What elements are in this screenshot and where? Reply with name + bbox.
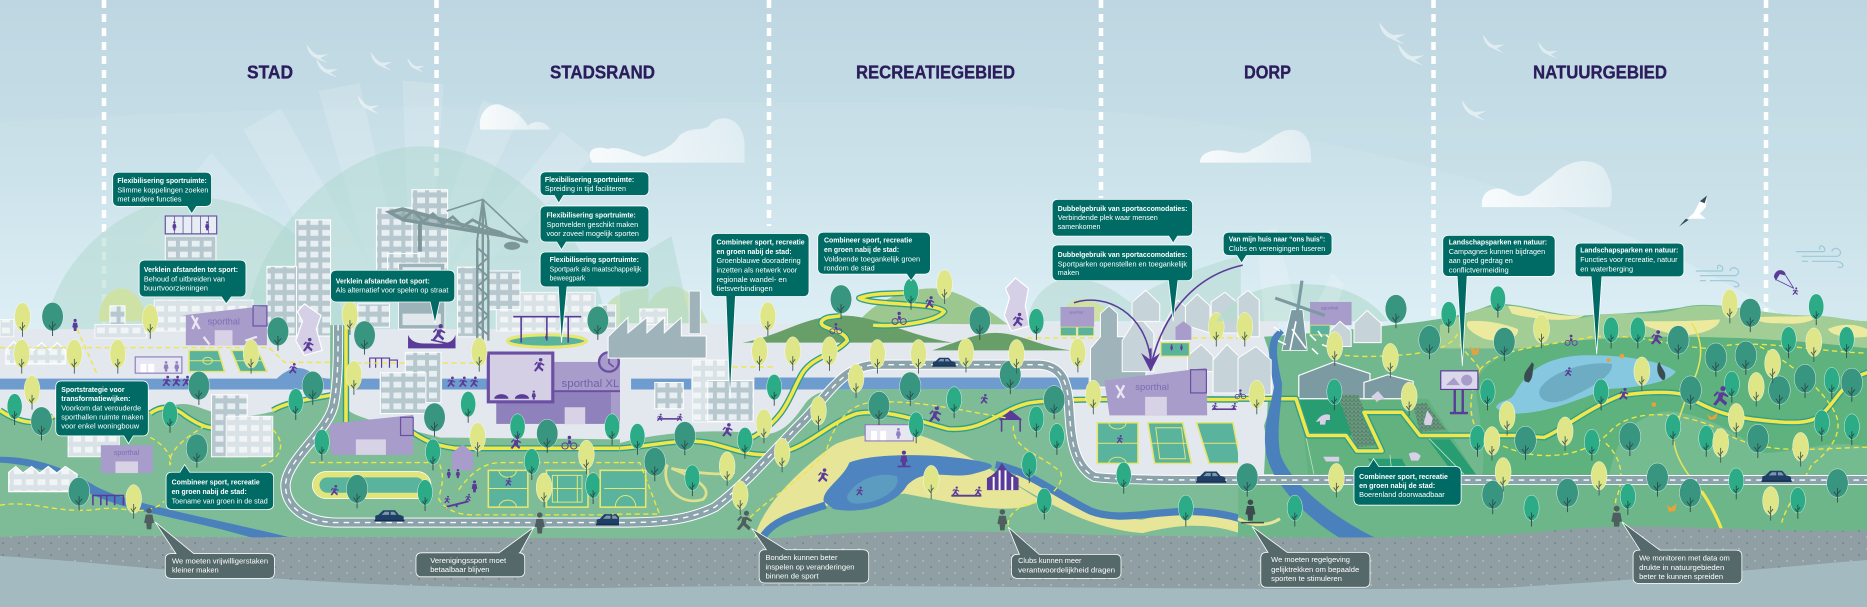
callout: sportvelden geschikt	[540, 206, 649, 250]
row of canal houses	[6, 341, 65, 364]
callout: buurtvoorzieningen: Behoud of uitbreiden van	[144, 275, 225, 283]
car natuur	[1761, 471, 1792, 482]
callout: toegankelijk groen	[818, 232, 930, 281]
ducks and butterflies	[1470, 346, 1718, 512]
quote: bonden: binnen de sport	[766, 572, 819, 581]
back hills	[620, 236, 1241, 325]
callout: waterberging: en waterberging	[1580, 264, 1633, 273]
farm fields	[1264, 399, 1476, 474]
figure: paddler	[1241, 500, 1264, 523]
quote: regelgeving: gelijktrekken om bepaalde	[1271, 565, 1360, 574]
callout: sportstrategie: Voorkom dat verouderde	[61, 403, 141, 412]
urban grey ground	[620, 323, 1241, 484]
callout: groenblauwe dooradering	[711, 233, 809, 399]
runners natuur	[1235, 330, 1729, 406]
seagull	[1679, 195, 1707, 226]
village houses	[1122, 290, 1241, 393]
climbing wall	[296, 304, 322, 355]
callout: groenblauwe dooradering: fietsverbindingen	[716, 284, 773, 293]
cars	[374, 510, 626, 525]
cafe with glass	[1161, 321, 1191, 356]
callout: ons huis: Clubs en verenigingen fuseren	[1229, 244, 1325, 253]
panel: stad scene	[0, 44, 648, 542]
callout: boerenland: Combineer sport, recreatie	[1359, 472, 1448, 481]
side yellow trail	[1674, 323, 1722, 530]
callout: verbindende plek: Verbindende plek waar mensen	[1058, 213, 1158, 222]
dashed paths lower	[0, 426, 621, 515]
callout: sportpark beweegpark: Flexibilisering sportruimte:	[550, 255, 639, 264]
callout: sportpark beweegpark	[540, 252, 649, 343]
callout: groenblauwe dooradering: en groen nabij de stad:	[716, 247, 792, 256]
farm sheds	[1299, 362, 1413, 399]
callouts: middle section	[711, 199, 1193, 583]
callout: sportstrategie: Sportstrategie voor	[61, 385, 125, 394]
callout: sportparken openstellen: maken	[1058, 268, 1079, 277]
quote: clubs: Clubs kunnen meer	[1018, 556, 1082, 565]
village path connector	[1208, 392, 1241, 408]
trees recreatie	[630, 270, 1224, 526]
cafe and playground	[444, 444, 477, 507]
callout: verbindende plek: Dubbelgebruik van sportaccomodaties:	[1058, 204, 1187, 213]
cloud stad	[480, 104, 550, 130]
recreation hills	[743, 288, 1071, 350]
urban grey ground	[0, 329, 621, 445]
road stad	[285, 325, 621, 523]
back hills village	[1216, 228, 1388, 321]
climbing wall recreation	[1004, 278, 1029, 331]
section titles: NATUURGEBIED	[1533, 62, 1667, 82]
runners and cyclist stadsrand	[511, 435, 577, 449]
swimmer and rowers	[72, 319, 478, 387]
hall by road	[329, 415, 413, 455]
changing rooms	[135, 357, 182, 373]
callout: ons huis: Van mijn huis naar “ons huis”:	[1229, 235, 1325, 244]
figure: volunteer	[144, 508, 154, 529]
sky swoop	[0, 0, 1867, 340]
callout: slimme koppelingen: met andere functies	[117, 194, 182, 203]
yellow meander near fields	[666, 465, 735, 501]
callout: toename groen: Combineer sport, recreatie	[172, 478, 260, 487]
dashed paths recreation	[612, 338, 1241, 530]
outdoor gym	[370, 358, 397, 368]
figure: federations runner	[737, 511, 752, 530]
canal	[0, 368, 488, 389]
road natuur	[1238, 467, 1867, 493]
low-rise apartment blocks	[68, 395, 273, 457]
half pipe with skater	[408, 324, 456, 348]
callout: campagnes	[1443, 235, 1555, 366]
river stad	[0, 457, 293, 538]
panel: stadsrand and recreatie scene	[590, 118, 1243, 542]
crops	[1338, 395, 1446, 447]
old town row	[9, 466, 77, 492]
clouds natuur	[1200, 130, 1612, 207]
section titles: DORP	[1244, 62, 1291, 82]
sports fields stadsrand	[488, 470, 640, 507]
quote: regelgeving	[1252, 526, 1370, 587]
quote: monitoren: drukte in natuurgebieden	[1639, 563, 1724, 572]
callout: spelen op straat	[331, 270, 455, 323]
sports fields village	[1097, 423, 1241, 463]
callout: sportparken openstellen: Sportparken openstellen en toegankelijk	[1058, 259, 1187, 268]
callout: toegankelijk groen: Voldoende toegankelijk groen	[824, 254, 920, 263]
callout: campagnes: Campagnes kunnen bijdragen	[1449, 247, 1545, 256]
callout: spreiding in tijd: Spreiding in tijd faciliteren	[545, 184, 626, 193]
village sport hall: sporthal	[1135, 381, 1169, 392]
beach	[754, 433, 1039, 538]
small sporthal and fields	[1060, 307, 1094, 336]
callout: toegankelijk groen: Combineer sport, recreatie	[824, 236, 913, 245]
village grey ground	[1238, 321, 1278, 484]
river	[762, 465, 1241, 538]
callout: sportstrategie	[56, 381, 148, 444]
quote: bonden	[752, 528, 869, 583]
quote: vrijwilligerstaken	[155, 522, 274, 578]
callout: groenblauwe dooradering: regionale wandel- en	[716, 275, 787, 284]
nature lake	[1496, 355, 1676, 414]
road recreation	[619, 365, 1241, 523]
hill path	[859, 292, 944, 326]
quote: betaalbaar	[416, 527, 534, 577]
lower green band	[1238, 484, 1867, 542]
nature ground	[1264, 304, 1867, 542]
sun rays	[138, 81, 593, 314]
lower nature ground	[1608, 411, 1867, 484]
dunes	[1440, 306, 1867, 348]
callout: waterberging: Landschapsparken en natuur:	[1580, 246, 1678, 254]
outdoor sports shelter	[507, 317, 586, 347]
callouts: right section	[1223, 232, 1742, 587]
callout: boerenland	[1354, 459, 1461, 505]
callout: verbindende plek	[1052, 199, 1193, 243]
callout: sportstrategie: sporthallen ruimte maken	[61, 413, 144, 422]
callout: slimme koppelingen: Slimme koppelingen zoeken	[117, 185, 208, 194]
section titles: STADSRAND	[550, 62, 655, 82]
sports field end	[600, 470, 646, 507]
figure: clubs	[997, 509, 1007, 530]
wind swirls	[1696, 246, 1843, 287]
white birds flock	[1274, 327, 1333, 354]
village church	[1091, 306, 1146, 387]
section dividers	[104, 0, 1766, 325]
river dorp	[1265, 329, 1376, 538]
callout: campagnes: aan goed gedrag en	[1449, 256, 1513, 265]
gazebo	[1000, 411, 1021, 432]
village small buildings: sporthal	[1321, 306, 1338, 312]
callout: sportpark beweegpark: Sportpark als maatschappelijk	[550, 264, 641, 273]
factory	[608, 291, 706, 358]
quote: regelgeving: We moeten regelgeving	[1271, 555, 1350, 564]
green path	[620, 399, 1241, 455]
seesaw and figures village	[1212, 403, 1237, 410]
callout: sportstrategie: voor enkel woningbouw	[61, 422, 140, 431]
quote: vrijwilligerstaken: We moeten vrijwilligerstaken	[172, 557, 268, 566]
purple sports hall	[181, 306, 267, 346]
callout: sportvelden geschikt: Flexibilisering sportruimte:	[546, 211, 636, 220]
callout: campagnes: conflictvermeiding	[1449, 266, 1509, 274]
panel: dorp and natuur scene	[1200, 22, 1867, 542]
callout: toename groen: en groen nabij de stad:	[172, 487, 247, 496]
quote: monitoren: beter te kunnen spreiden	[1639, 572, 1723, 581]
sports fields stad	[189, 350, 267, 372]
callout: spelen op straat: Verklein afstanden tot sport:	[336, 276, 430, 285]
callout: spreiding in tijd: Flexibilisering sportruimte:	[545, 175, 634, 184]
callouts: left section	[56, 172, 649, 578]
gravel foreground	[0, 526, 1867, 607]
section titles: STAD	[247, 62, 293, 82]
dashed paths natuur	[1336, 333, 1867, 533]
callout: buurtvoorzieningen: Verklein afstanden tot sport:	[144, 265, 238, 274]
callout: toegankelijk groen: rondom de stad	[824, 264, 875, 273]
quote: bonden: inspelen op veranderingen	[766, 563, 854, 571]
callout: boerenland: en groen nabij de stad:	[1359, 481, 1435, 490]
cloud middle	[590, 118, 745, 163]
running track	[312, 472, 431, 499]
trees natuur	[1236, 286, 1863, 526]
herons	[1524, 362, 1665, 382]
callout: toegankelijk groen: en groen nabij de stad:	[824, 245, 899, 254]
green branch path	[752, 316, 847, 437]
callout: buurtvoorzieningen	[139, 260, 246, 304]
dashed paths upper	[0, 329, 480, 374]
callout: toename groen	[166, 465, 274, 509]
small sporthal and fields: sporthal	[1069, 310, 1083, 315]
birds natuur	[1379, 22, 1558, 120]
quote: bonden: Bonden kunnen beter	[766, 553, 838, 562]
callout: spelen op straat: Als alternatief voor spelen op straat	[336, 286, 449, 295]
windmill	[1275, 281, 1325, 350]
apartment blocks	[655, 360, 753, 422]
callout: waterberging: Functies voor recreatie, natuur	[1580, 255, 1678, 264]
quote: vrijwilligerstaken: kleiner maken	[172, 566, 219, 575]
canal	[631, 377, 1089, 389]
lower green ground	[0, 395, 621, 542]
quote: regelgeving: sporten te stimuleren	[1271, 574, 1342, 583]
figure: monitoring	[1611, 506, 1622, 528]
callout: groenblauwe dooradering: Groenblauwe dooradering	[716, 256, 801, 265]
green path left	[0, 395, 332, 428]
callout: sportparken openstellen: Dubbelgebruik van sportaccomodaties:	[1058, 250, 1187, 259]
callout: campagnes: Landschapsparken en natuur:	[1449, 237, 1547, 246]
section titles	[247, 62, 1667, 82]
dark nature ground	[1476, 337, 1867, 484]
billboard campaign	[1441, 371, 1478, 413]
trees stad	[7, 301, 620, 519]
birds stad	[306, 44, 425, 114]
hills behind the city	[47, 146, 648, 333]
callout: waterberging	[1575, 243, 1684, 354]
quote: clubs	[1008, 527, 1121, 578]
quote: monitoren	[1622, 522, 1742, 583]
kite	[1774, 270, 1798, 295]
pale river arc	[1238, 519, 1280, 525]
nearby apartment blocks	[380, 352, 441, 413]
small sporthal	[101, 445, 153, 473]
callout: sportstrategie: transformatiewijken:	[61, 394, 130, 403]
green path right	[338, 325, 621, 448]
village sport hall	[1104, 368, 1207, 415]
callout: sportpark beweegpark: beweegpark	[550, 274, 585, 283]
callout: ons huis	[1223, 232, 1332, 263]
callout: boerenland: Boerenland doorwaadbaar	[1359, 490, 1445, 499]
callout: groenblauwe dooradering: inzetten als netwerk voor	[716, 266, 798, 275]
quote: clubs: verantwoordelijkheid dragen	[1018, 566, 1115, 575]
seesaw and swimmers	[657, 414, 982, 497]
callout: toename groen: Toename van groen in de stad	[172, 496, 268, 505]
changing rooms recreation	[865, 425, 913, 441]
callout: sportparken openstellen	[1052, 245, 1193, 321]
small sporthal: sporthal	[114, 450, 140, 457]
figure: association	[535, 512, 545, 533]
callout: sportvelden geschikt: Sportvelden geschikt maken	[546, 220, 638, 229]
farm path	[1238, 372, 1867, 451]
callout: slimme koppelingen: Flexibilisering sportruimte:	[117, 176, 207, 185]
hall XL: sporthal XL	[561, 378, 619, 390]
farm animals	[1316, 391, 1433, 461]
purple sports hall: sporthal	[208, 316, 240, 326]
cars	[932, 358, 1226, 483]
lower green ground	[619, 389, 1240, 542]
callout: groenblauwe dooradering: Combineer sport, recreatie	[716, 238, 805, 247]
village small buildings	[1238, 290, 1381, 395]
circus tent	[987, 463, 1019, 490]
section titles: RECREATIEGEBIED	[856, 62, 1015, 82]
callout: spreiding in tijd	[540, 172, 649, 203]
lake	[824, 451, 992, 511]
callout: slimme koppelingen	[113, 172, 212, 214]
callout: buurtvoorzieningen: buurtvoorzieningen	[144, 284, 208, 293]
crane	[389, 199, 528, 341]
quote: betaalbaar: betaalbaar blijven	[430, 565, 490, 574]
runners	[722, 296, 988, 437]
quote: monitoren: We monitoren met data om	[1639, 554, 1730, 563]
purple arrows to sporthal	[1074, 265, 1243, 372]
quote: betaalbaar: Verenigingssport moet	[430, 556, 507, 565]
city buildings	[0, 190, 616, 338]
rooftop sport cage	[165, 216, 217, 234]
callout: sportvelden geschikt: voor zoveel mogelijk sporten	[546, 229, 639, 238]
playground	[93, 496, 123, 505]
callout: verbindende plek: samenkomen	[1058, 222, 1100, 231]
hall XL	[488, 352, 622, 424]
